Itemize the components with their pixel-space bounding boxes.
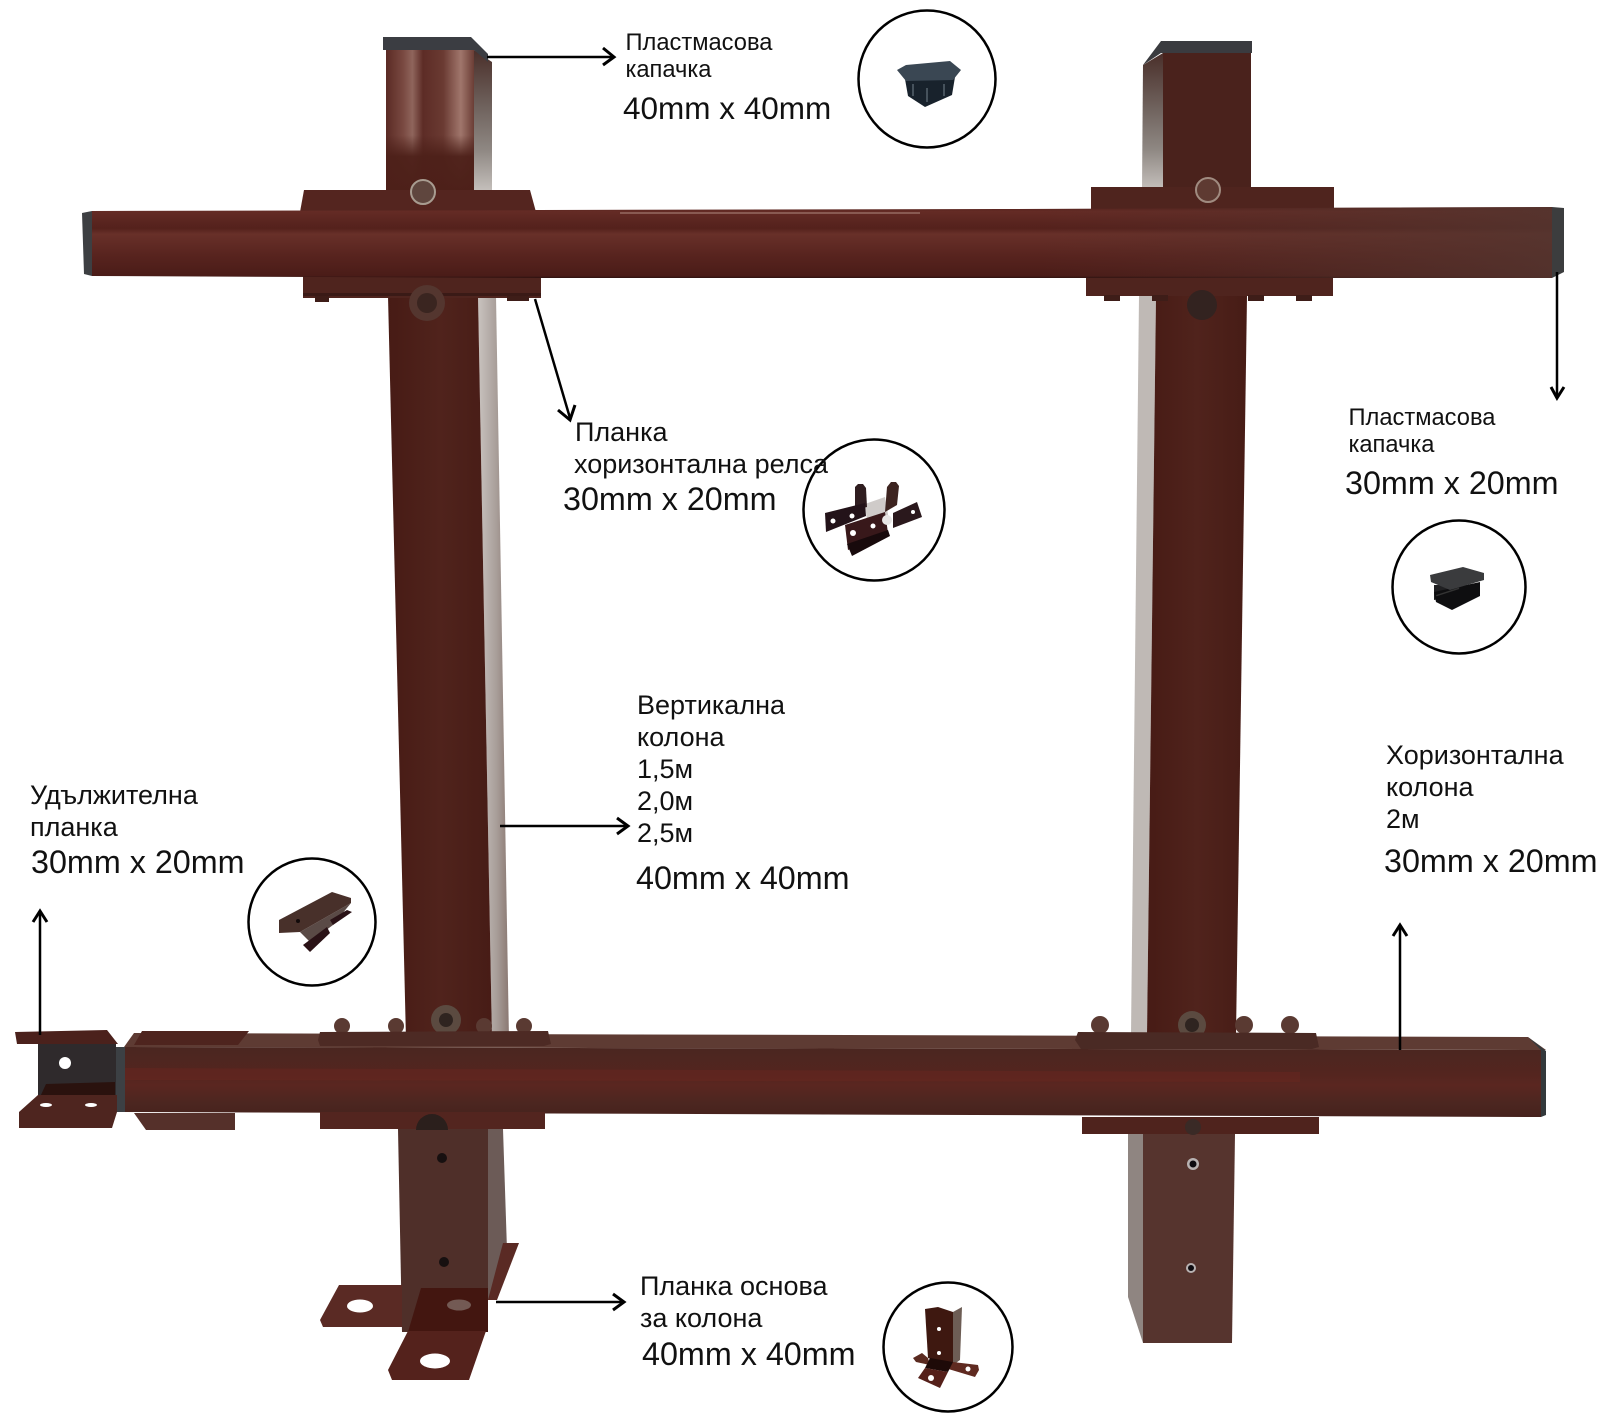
right post top section with cap [1142, 41, 1252, 190]
label: rail bracket: Планка [575, 417, 668, 447]
label: plastic cap 40x40: капачка [626, 57, 712, 83]
bottom horizontal rail [115, 1033, 1546, 1117]
label: vertical column: 2,5м [637, 818, 693, 848]
arrow: plastic cap 40x40 [487, 48, 614, 65]
label: horizontal column: колона [1386, 772, 1475, 802]
top horizontal rail [82, 207, 1564, 278]
post foot section [320, 1129, 519, 1380]
arrow: column base plate [496, 1294, 624, 1310]
label: extension plate: Удължителна [30, 780, 199, 810]
arrow: rail bracket [535, 299, 575, 420]
arrow: vertical column [500, 818, 628, 834]
label: horizontal column: 2м [1386, 804, 1420, 834]
label: rail bracket: 30mm x 20mm [563, 481, 777, 517]
right vertical post [1128, 41, 1252, 1343]
label: vertical column: Вертикална [637, 690, 786, 720]
label: column base plate: за колона [640, 1303, 763, 1333]
label: column base plate: Планка основа [640, 1271, 828, 1301]
label: vertical column: 40mm x 40mm [636, 860, 850, 896]
icon: cap 40x40 in circle [858, 10, 996, 148]
post long section [388, 296, 509, 1040]
arrow: plastic cap 30x20 [1551, 272, 1564, 398]
label: column base plate: 40mm x 40mm [642, 1336, 856, 1372]
label: plastic cap 40x40: Пластмасова [626, 30, 773, 56]
arrow: horizontal column [1393, 925, 1407, 1050]
label: extension plate [30, 780, 245, 880]
right post long section [1131, 296, 1247, 1035]
label: vertical column: колона [637, 722, 726, 752]
label: plastic cap 30x20 [1345, 405, 1559, 501]
post top section with cap [383, 37, 492, 192]
label: plastic cap 40x40: 40mm x 40mm [623, 90, 831, 126]
label: plastic cap 30x20: капачка [1348, 432, 1435, 458]
label: extension plate: планка [30, 812, 119, 842]
label: rail bracket [563, 417, 829, 517]
icon: column base plate in circle [884, 1282, 1012, 1412]
bottom rail clamps left [318, 1005, 551, 1130]
left vertical post [320, 37, 519, 1380]
label: rail bracket: хоризонтална релса [574, 449, 829, 479]
label: column base plate [640, 1271, 856, 1372]
bottom rail clamps right [1075, 1011, 1319, 1135]
top rail clamps left [300, 180, 541, 321]
label: extension plate: 30mm x 20mm [31, 844, 245, 880]
arrow: extension plate [33, 911, 47, 1035]
right post foot section [1128, 1134, 1235, 1343]
label: horizontal column [1384, 740, 1598, 879]
icon: rail bracket in circle [804, 440, 944, 580]
icon: extension plate in circle [248, 858, 376, 986]
extension connector at left end of bottom rail [15, 1030, 249, 1130]
label: plastic cap 40x40 [623, 30, 831, 126]
label: vertical column: 1,5м [637, 754, 693, 784]
label: horizontal column: 30mm x 20mm [1384, 843, 1598, 879]
label: vertical column: 2,0м [637, 786, 693, 816]
label: plastic cap 30x20: 30mm x 20mm [1345, 465, 1559, 501]
label: vertical column [636, 690, 850, 896]
top rail clamps right [1086, 178, 1334, 320]
icon: cap 30x20 in circle [1392, 520, 1526, 654]
label: horizontal column: Хоризонтална [1386, 740, 1565, 770]
label: plastic cap 30x20: Пластмасова [1348, 405, 1496, 431]
